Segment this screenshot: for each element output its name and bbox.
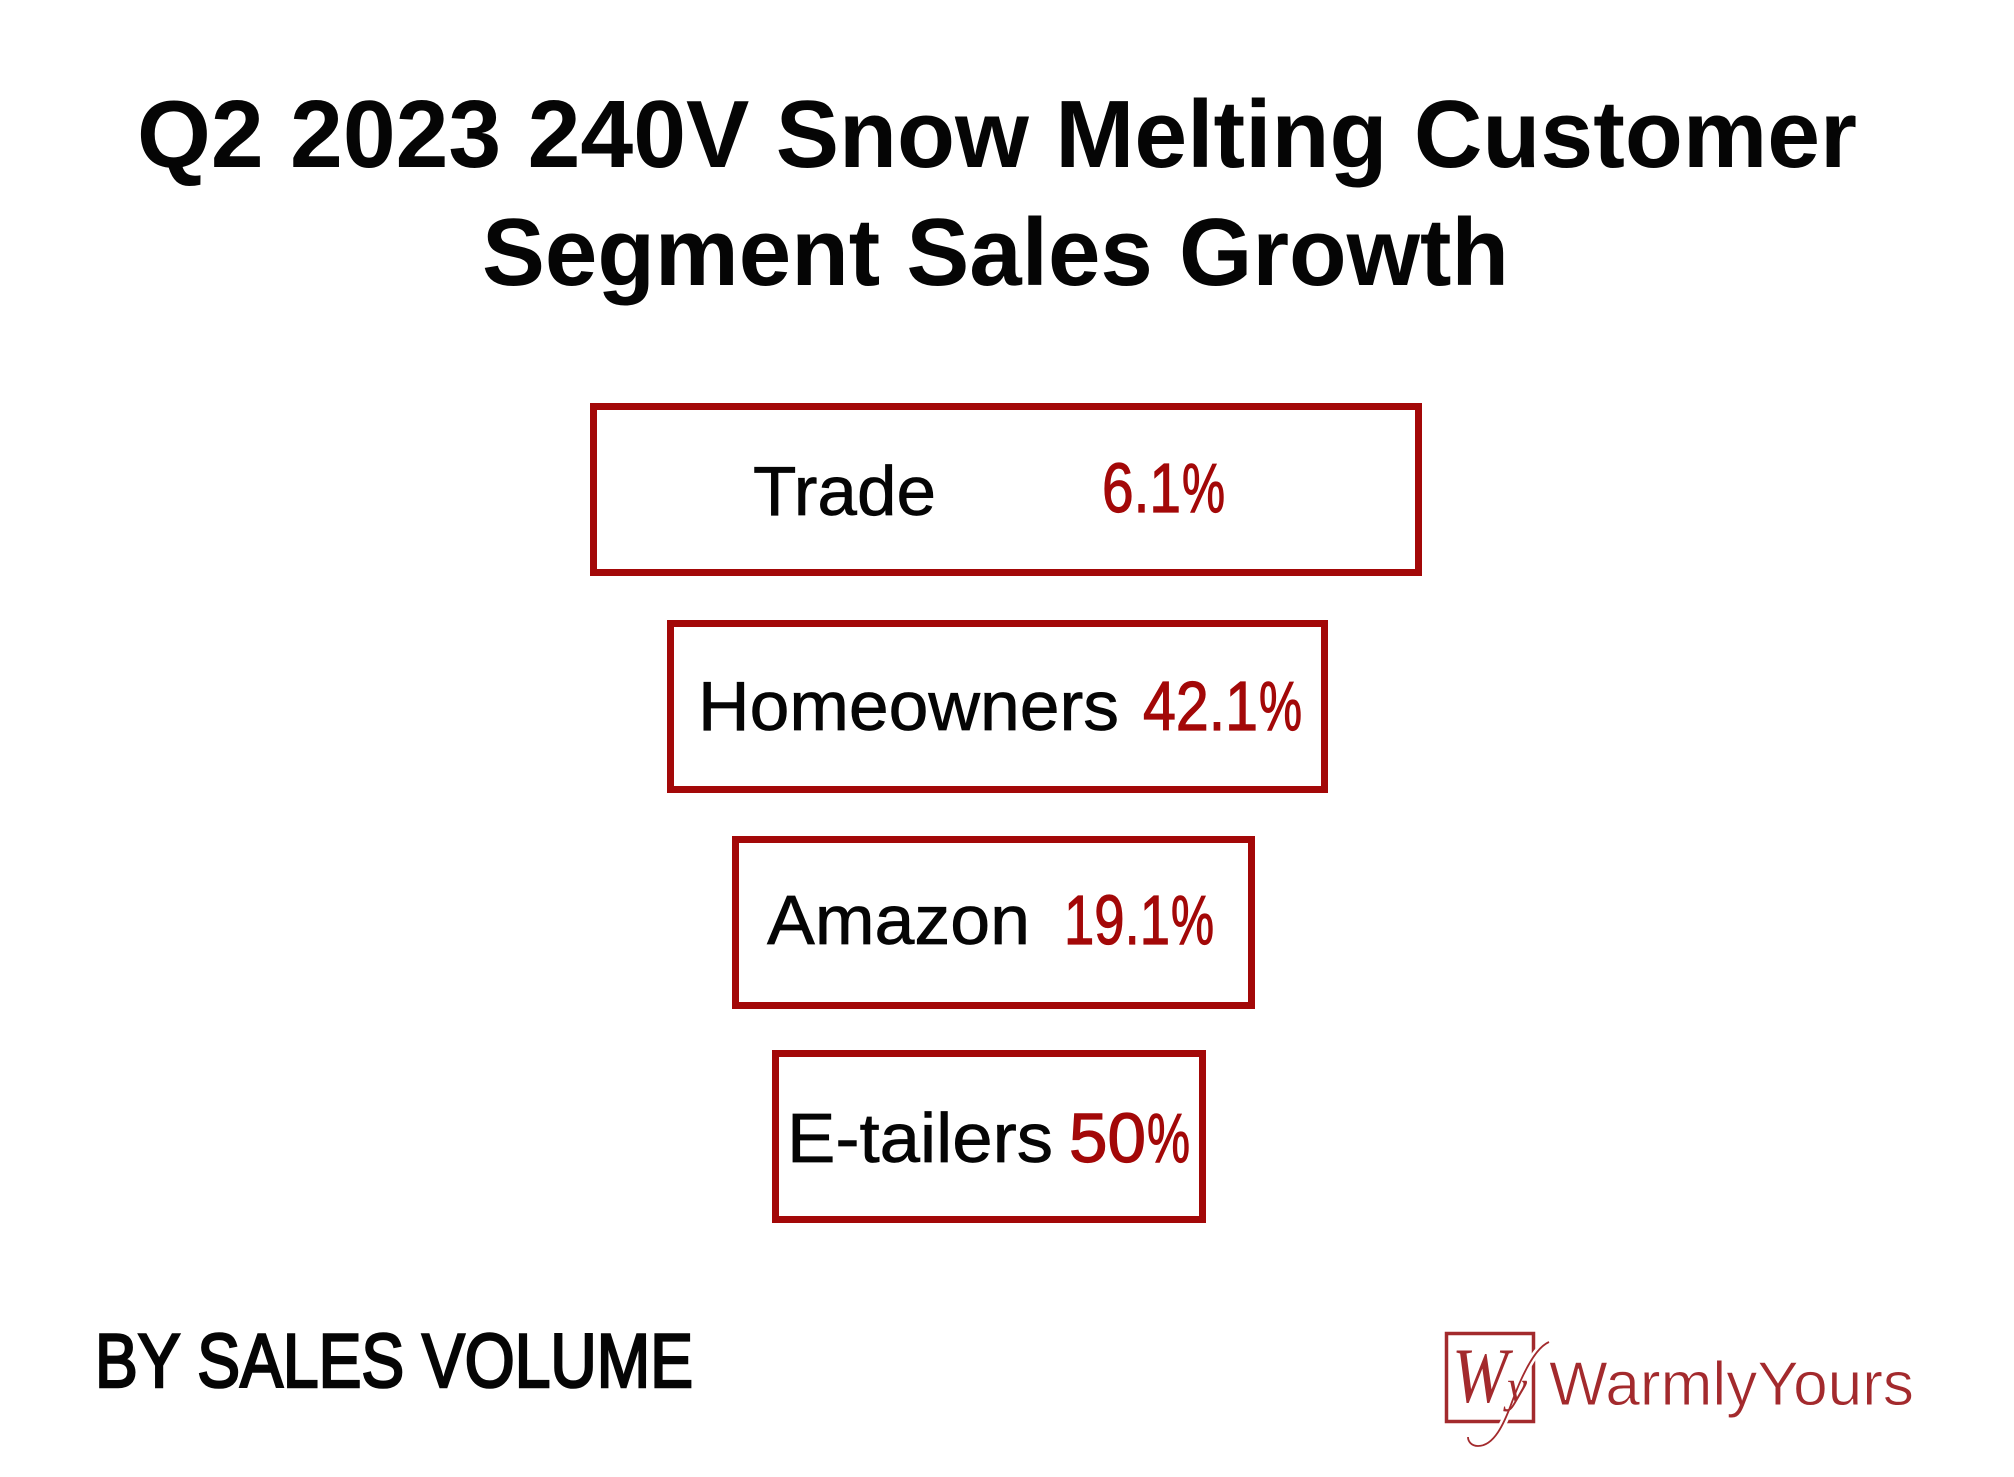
title: Segment Sales Growth: [482, 199, 1509, 306]
panel: Trade 6.1%: Trade: [753, 452, 936, 530]
panel: Homeowners 42.1%: [670, 624, 1324, 790]
panel: Homeowners 42.1%: Homeowners: [698, 667, 1119, 745]
panel: Amazon 19.1%: 19.1: [1064, 881, 1170, 959]
panel: E-tailers 50%: E-tailers: [787, 1099, 1053, 1177]
panel: E-tailers 50%: [776, 1054, 1202, 1220]
icon: Wy monogram square: [1446, 1332, 1549, 1446]
panel: E-tailers 50%: %: [1147, 1099, 1190, 1177]
icon: Wy monogram square: W: [1452, 1332, 1513, 1419]
panel: Homeowners 42.1%: 42.1: [1143, 667, 1258, 745]
wordmark: WarmlyYours: [1549, 1350, 1914, 1419]
panel: Trade 6.1%: %: [1182, 449, 1225, 527]
panel: Amazon 19.1%: [736, 840, 1252, 1006]
panel: Amazon 19.1%: %: [1171, 881, 1214, 959]
panel: Trade 6.1%: 6.1: [1102, 449, 1181, 527]
panel: Homeowners 42.1%: %: [1259, 667, 1302, 745]
footnote: by sales volume: BY SALES VOLUME: [95, 1319, 693, 1404]
title: Q2 2023 240V Snow Melting Customer: [137, 81, 1857, 188]
panel: Amazon 19.1%: Amazon: [767, 881, 1030, 959]
icon: Wy monogram square: y: [1503, 1361, 1528, 1412]
panel: Trade 6.1%: [594, 406, 1418, 572]
panel: E-tailers 50%: 50: [1069, 1099, 1146, 1177]
title: [137, 81, 1857, 306]
logo: WarmlyYours: [1446, 1332, 1914, 1446]
